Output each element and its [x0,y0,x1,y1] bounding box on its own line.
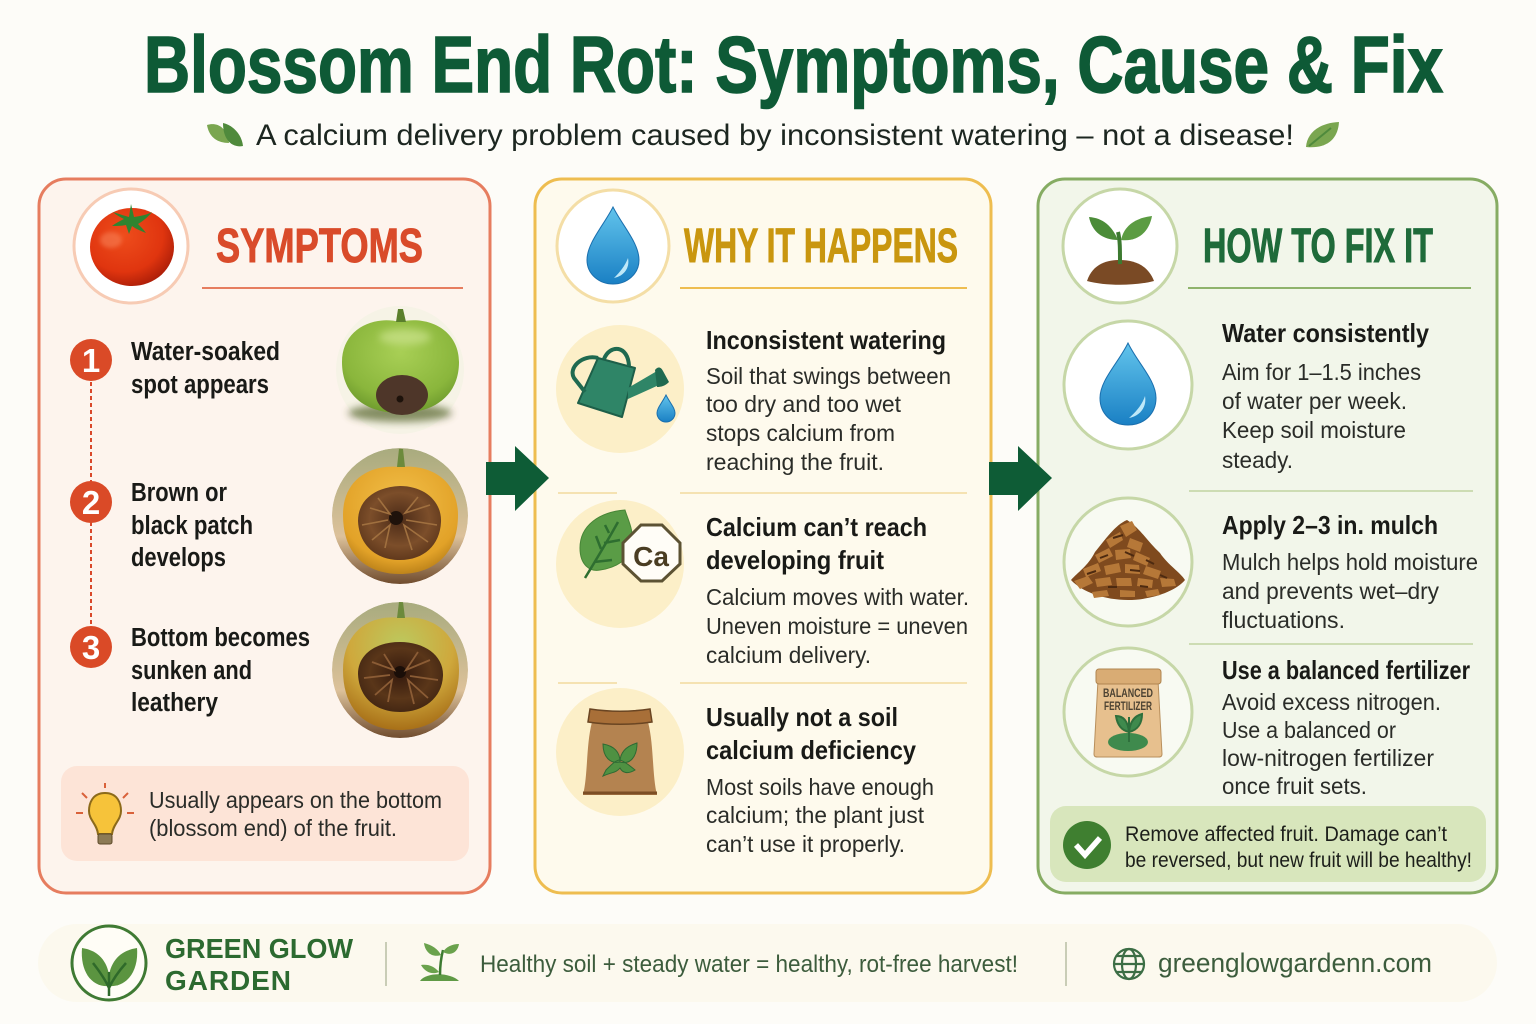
reason 2: calcium delivery. [706,642,871,668]
logo: green glow garden [72,926,354,1000]
icon: tomato [74,189,188,303]
step 1: 1 [82,342,100,379]
icon: water drop [557,190,669,302]
fix 1: Aim for 1–1.5 inches [1222,359,1421,385]
tagline: Healthy soil + steady water = healthy, rot-free harvest! [480,951,1018,978]
reason 1: reaching the fruit. [706,449,884,475]
fix 2: Mulch helps hold moisture [1222,549,1478,575]
fix 3: Use a balanced fertilizer [1222,655,1470,685]
reason 1: Soil that swings between [706,363,951,389]
step 3: Bottom becomes [131,624,310,652]
callout: remove affected fruit: be reversed, but new fruit will be healthy! [1125,849,1472,872]
reason 2: Calcium can’t reach [706,512,927,542]
reason 2: Uneven moisture = uneven [706,613,968,639]
fix 3: once fruit sets. [1222,773,1367,799]
step 3 [70,624,310,717]
fix 1: Water consistently [1222,318,1429,348]
icon: fertilizer bag: FERTILIZER [1104,699,1152,713]
step 2: 2 [82,484,100,521]
callout: where it appears [61,766,469,861]
icon: check mark [1063,821,1111,869]
icon: sprout [420,943,459,981]
icon: fertilizer bag: BALANCED [1103,686,1153,700]
reason 2: Calcium moves with water. [706,584,969,610]
reason 1 [706,325,951,475]
icon: leaf and calcium [556,500,684,628]
reason 1: Inconsistent watering [706,325,946,355]
step 1 [70,338,280,399]
fix 3: Avoid excess nitrogen. [1222,689,1441,715]
icon: light bulb [76,783,134,844]
photo: sunken leathery fruit [332,602,468,738]
website: greenglowgardenn.com [1158,948,1432,978]
panel background [535,179,991,893]
fix 3: Use a balanced or [1222,717,1396,743]
icon: soil bag [556,688,684,816]
step 3: sunken and [131,657,252,685]
icon: left leaf [207,123,243,146]
fix 2: and prevents wet–dry [1222,578,1439,604]
callout: remove affected fruit: Remove affected fruit. Damage can’t [1125,823,1447,846]
arrow: symptoms to why [486,446,549,511]
panel: symptoms [39,179,490,893]
reason 1: too dry and too wet [706,391,902,417]
callout: remove affected fruit [1050,806,1486,882]
reason 3: Usually not a soil [706,702,898,732]
logo: green glow garden: GREEN GLOW [165,933,354,964]
fix 2 [1222,510,1478,633]
icon: fertilizer bag [1064,648,1192,776]
step 1: spot appears [131,371,269,399]
step 1: Water-soaked [131,338,280,366]
icon: globe [1114,949,1144,979]
subtitle with leaf icons [207,119,1339,152]
reason 3 [706,702,934,857]
icon: mulch pile [1064,498,1192,626]
reason 2: developing fruit [706,545,884,575]
panel background [1038,179,1497,893]
callout: where it appears: Usually appears on the bottom [149,787,442,813]
step 2 [70,479,253,572]
step 3: leathery [131,689,219,717]
panel background [39,179,490,893]
fix 3 [1222,655,1470,799]
panel: why it happens [535,179,991,893]
fix 1: Keep soil moisture [1222,417,1406,443]
fix 1: of water per week. [1222,388,1407,414]
panel: how to fix it [1038,179,1497,893]
photo: green fruit with spot [336,306,464,434]
reason 3: calcium; the plant just [706,802,925,828]
reason 3: calcium deficiency [706,735,916,765]
logo: green glow garden: GARDEN [165,965,291,996]
reason 3: can’t use it properly. [706,831,905,857]
step 3: 3 [82,629,100,666]
arrow: why to fix [989,446,1052,511]
fix 2: fluctuations. [1222,607,1345,633]
step 2: develops [131,544,226,572]
subtitle text: A calcium delivery problem caused by inconsistent watering – not a disease! [256,119,1294,152]
fix 1 [1222,318,1429,473]
icon: seedling in soil [1063,189,1177,303]
fix 1: steady. [1222,447,1293,473]
reason 1: stops calcium from [706,420,895,446]
reason 3: Most soils have enough [706,774,934,800]
step 2: Brown or [131,479,227,507]
heading: how to fix it: HOW TO FIX IT [1203,220,1433,273]
fix 3: low-nitrogen fertilizer [1222,745,1434,771]
icon: water drop [1064,321,1192,449]
callout: where it appears: (blossom end) of the fruit. [149,815,397,841]
step 2: black patch [131,512,253,540]
heading: why it happens: WHY IT HAPPENS [684,220,958,273]
reason 2 [706,512,969,668]
icon: leaf and calcium: Ca [633,541,669,572]
icon: watering can [556,325,684,453]
icon: right leaf [1306,122,1339,147]
photo: yellow fruit with brown patch [332,448,468,584]
fix 2: Apply 2–3 in. mulch [1222,510,1438,540]
footer banner [38,924,1497,1002]
heading: symptoms: SYMPTOMS [216,220,423,273]
